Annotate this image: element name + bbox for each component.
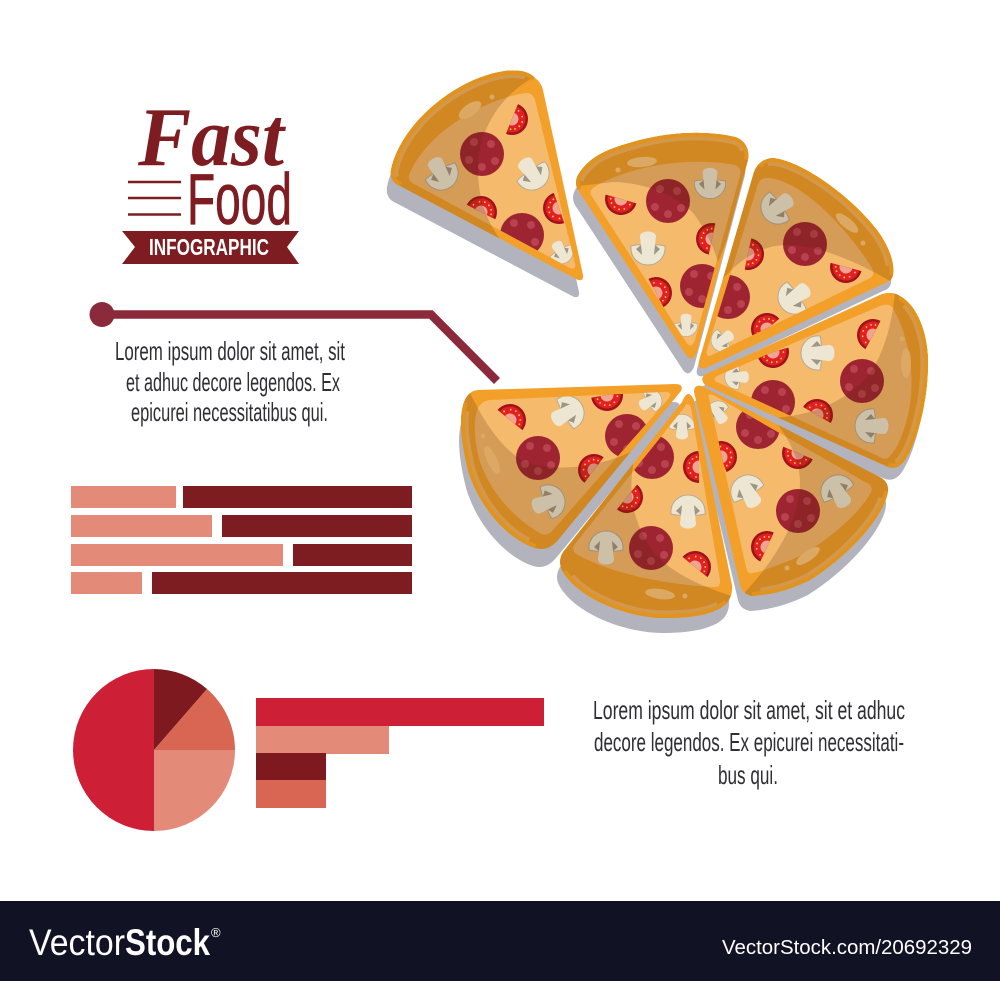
ribbon label: INFOGRAPHIC — [149, 234, 269, 260]
toppings — [418, 104, 577, 268]
ribbon banner — [122, 231, 299, 264]
title: Fast Food Infographic logo — [122, 91, 299, 264]
pizza illustration — [380, 60, 940, 633]
footer bar — [0, 901, 1000, 981]
pizza slice: right — [702, 292, 928, 468]
toppings — [710, 400, 854, 562]
crust shading — [560, 464, 731, 618]
text block: lower callout: bus qui. — [718, 760, 778, 790]
crust shading — [745, 425, 888, 596]
footer logo: Vector — [29, 922, 125, 963]
pie chart — [73, 669, 235, 831]
footer logo: ® — [211, 925, 221, 940]
pizza slice: separated top-left — [380, 60, 583, 280]
pizza slice: top middle — [576, 132, 748, 358]
text block: upper callout: epicurei necessitatibus qui. — [131, 397, 328, 427]
text block: lower callout — [593, 695, 905, 790]
text block: upper callout — [115, 336, 345, 427]
crust shading — [778, 294, 928, 468]
toppings — [498, 392, 662, 520]
toppings — [601, 168, 726, 337]
text block: upper callout: et adhuc decore legendos. Ex — [126, 367, 340, 397]
toppings — [725, 313, 888, 443]
heading: Fast: Fast — [137, 91, 287, 184]
stepped bar chart — [256, 698, 544, 808]
split bar chart — [71, 486, 412, 594]
text block: upper callout: Lorem ipsum dolor sit amet, sit — [115, 336, 345, 366]
crust shading — [390, 70, 535, 238]
toppings — [710, 192, 862, 352]
heading: Food: Food — [187, 160, 292, 240]
footer logo: Stock — [125, 922, 210, 963]
crust shading — [461, 393, 630, 549]
slice drop shadows — [387, 88, 925, 633]
pizza slice: upper right — [698, 158, 894, 368]
crust shading — [576, 132, 748, 262]
footer logo — [29, 922, 221, 963]
crust shading — [722, 158, 894, 280]
pizza slice: lower middle — [560, 394, 732, 618]
pizza slice: lower right — [694, 386, 888, 596]
callout connector line with dot — [90, 302, 497, 381]
footer image id: VectorStock.com/20692329 — [722, 937, 972, 959]
pizza slice: left — [461, 384, 682, 549]
toppings — [589, 414, 718, 577]
speed lines — [128, 182, 181, 214]
